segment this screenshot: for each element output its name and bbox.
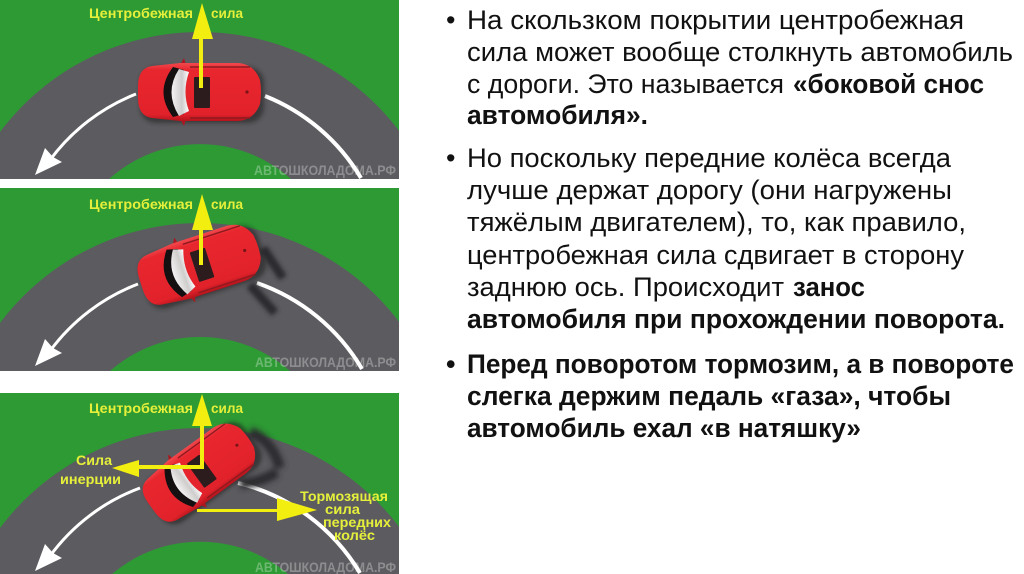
text block: braking advice: •: [446, 349, 455, 379]
label: braking force: колёс: [334, 527, 375, 543]
label: centrifugal force: [90, 198, 244, 212]
white trajectory line with arrow: [35, 94, 361, 178]
text block: lateral drift: [446, 5, 1013, 130]
icon: red car: [138, 223, 268, 311]
text block: rear axle skid: Но поскольку передние колёса всегда: [467, 143, 952, 173]
text block: lateral drift: сила может вообще столкнуть автомобиль: [467, 37, 1013, 67]
text block: rear axle skid: •: [446, 143, 455, 173]
label: centrifugal force: сила: [211, 5, 243, 21]
text block: lateral drift: автомобиля».: [467, 100, 648, 130]
label: braking force: [300, 492, 391, 540]
label: braking force: сила: [325, 501, 360, 517]
text block: lateral drift: «боковой снос: [793, 69, 984, 99]
road scene: [0, 188, 399, 371]
panel: skid with force vectors: [0, 393, 399, 574]
icon: red car: [138, 58, 264, 126]
text block: rear axle skid: тяжёлым двигателем), то, как правило,: [467, 207, 966, 237]
text block: rear axle skid: лучше держат дорогу (они нагружены: [467, 175, 952, 205]
text block: lateral drift: с дороги. Это называется: [467, 69, 784, 99]
icon: red car: [142, 420, 264, 526]
text block: rear axle skid: заднюю ось. Происходит: [467, 272, 784, 302]
arrow: centrifugal force: [192, 194, 213, 265]
skid marks: [240, 432, 280, 484]
label: inertia force: [61, 456, 120, 487]
label: centrifugal force: Центробежная: [89, 196, 193, 212]
text block: rear axle skid: занос: [793, 272, 865, 302]
label: centrifugal force: [90, 8, 244, 21]
watermark: АВТОШКОЛАДОМА.РФ: [254, 162, 396, 178]
skid marks: [250, 248, 283, 313]
arrow: braking force of front wheels: [197, 498, 317, 521]
label: centrifugal force: [90, 402, 244, 416]
text block: braking advice: Перед поворотом тормозим, а в повороте: [467, 349, 1014, 379]
label: braking force: передних: [323, 514, 391, 530]
road scene: [0, 393, 399, 574]
panel: car on curve, normal turn: [0, 0, 399, 179]
label: centrifugal force: сила: [211, 196, 243, 212]
label: braking force: Тормозящая: [300, 488, 388, 504]
panel: car starts to skid: [0, 188, 399, 371]
white trajectory line with arrow: [35, 283, 362, 369]
white trajectory line with arrow: [35, 483, 360, 573]
label: centrifugal force: Центробежная: [89, 400, 193, 416]
label: centrifugal force: сила: [211, 400, 243, 416]
text block: rear axle skid: центробежная сила сдвигает в сторону: [467, 240, 964, 270]
text block: rear axle skid: автомобиля при прохождении поворота.: [467, 304, 1005, 334]
road scene: [0, 0, 399, 179]
text block: braking advice: автомобиль ехал «в натяшку»: [467, 413, 861, 443]
text block: rear axle skid: [446, 143, 1005, 334]
arrow: centrifugal force: [192, 3, 213, 88]
watermark: АВТОШКОЛАДОМА.РФ: [255, 354, 396, 370]
text block: lateral drift: На скользком покрытии центробежная: [467, 5, 964, 35]
arrow: centrifugal force: [192, 394, 212, 469]
label: centrifugal force: Центробежная: [89, 5, 193, 21]
text block: lateral drift: •: [446, 5, 455, 35]
text block: braking advice: слегка держим педаль «газа», чтобы: [467, 381, 951, 411]
label: inertia force: Сила: [76, 452, 112, 468]
arrow: inertia force: [112, 460, 204, 477]
label: inertia force: инерции: [60, 471, 121, 487]
text block: braking advice: [446, 349, 1014, 443]
